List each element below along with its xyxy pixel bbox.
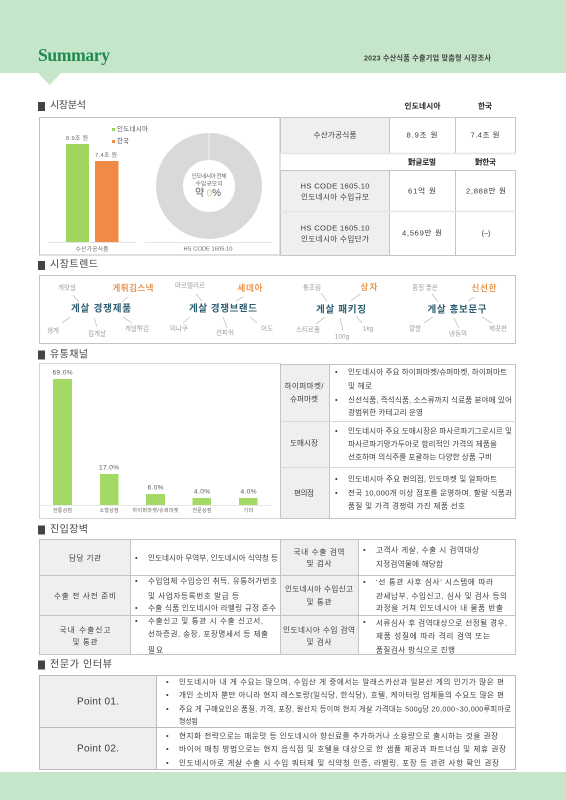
table: market data [280, 100, 516, 256]
donut chart: 수입규모의 [196, 180, 222, 188]
left content: 필요 [148, 644, 163, 654]
left content: • [135, 576, 138, 586]
row: convenience store: • [335, 488, 338, 498]
row: convenience store [294, 474, 512, 510]
report name: 2023 수산식품 수출기업 맞춤형 시장조사 [364, 54, 491, 62]
footer band [0, 772, 566, 800]
right content: 지정검역물에 해당함 [376, 558, 443, 568]
bar chart: channel share [40, 364, 280, 518]
table: entry barriers [39, 539, 516, 654]
row: hypermarket: 슈퍼마켓 [290, 394, 318, 404]
table: market data: 對한국 [475, 156, 496, 166]
header band [0, 0, 566, 85]
point 02: • [166, 758, 169, 768]
row: wholesale market: 도매시장 [290, 438, 318, 448]
point 01: Point 01. [77, 696, 119, 708]
left content: 수출 식품 인도네시아 라벨링 규정 준수 [148, 602, 276, 612]
keyword group: promo phrases: 게살 홍보문구 [428, 304, 487, 316]
keyword group: packaging: 게살 패키징 [316, 304, 366, 316]
table: market data: 한국 [478, 100, 492, 110]
row: wholesale market: 선호하며 의식주를 포괄하는 다양한 상품 구비 [348, 452, 492, 462]
row: wholesale market: • [335, 426, 338, 436]
legend [112, 124, 148, 145]
table: market data: 인도네시아 [404, 100, 440, 110]
keyword group: packaging: 스티로폼 [296, 324, 320, 334]
legend: 인도네시아 [117, 124, 148, 133]
row: convenience store: • [335, 474, 338, 484]
keyword group: promo phrases: 냉동의 [449, 328, 467, 338]
keyword group: competing brands: 게살 경쟁브랜드 [189, 302, 257, 314]
table: market data: 對글로벌 [408, 156, 436, 166]
left labels: 국내 수출신고 [60, 624, 110, 634]
heading: entry barriers [38, 522, 88, 536]
keyword group: packaging: 통조림 [303, 284, 321, 292]
keyword group: competing brands: 미나쿠 [170, 324, 188, 332]
donut chart: 인도네시아 전체 [192, 172, 226, 180]
row: hypermarket: 신선식품, 즉석식품, 소스류까지 식료품 분야에 있어 [348, 394, 512, 404]
heading: expert interview: 전문가 인터뷰 [50, 658, 112, 670]
keyword group: competing products: 게맛살 [58, 282, 76, 292]
bar chart: channel share: 기타 [244, 507, 254, 514]
point 01: 주요 게 구매요인은 품질, 가격, 포장, 원산지 등이며 현지 게살 가격대는 500g당 20,000~30,000루피아로 [179, 704, 511, 714]
row: convenience store: 편의점 [294, 488, 314, 498]
right content: 제품 성질에 따라 격리 검역 또는 [376, 630, 490, 640]
right content: 과정을 거쳐 인도네시아 내 물품 반출 [376, 602, 503, 612]
section: distribution channels [38, 348, 516, 518]
table: market data: 2,888만 원 [466, 186, 506, 196]
bar chart: channel share: 전통상점 [53, 507, 72, 514]
right content: 관세납부, 수입신고, 심사 및 검사 등의 [376, 590, 507, 600]
heading: market trends: 시장트렌드 [50, 258, 98, 270]
legend: 한국 [117, 137, 129, 145]
point 02 [77, 730, 506, 768]
table: market data: (–) [482, 228, 491, 238]
point 01: 형성됨 [179, 716, 198, 726]
point 01: • [166, 690, 169, 700]
bar chart: channel share: 하이퍼마켓/슈퍼마켓 [132, 507, 179, 514]
keyword group: competing products: 게살 경쟁제품 [71, 302, 131, 314]
point 01: 인도네시아 내 게 수요는 많으며, 수입산 게 중에서는 알래스카산과 일본산 게의 인기가 많은 편 [179, 676, 504, 686]
point 01 [77, 676, 511, 726]
left labels: 담당 기관 [69, 552, 101, 562]
right content: 고객사 게살, 수출 시 검역대상 [376, 544, 479, 554]
right content [363, 544, 507, 654]
table: market data: 7.4조 원 [470, 130, 500, 140]
left content: 선하증권, 송장, 포장명세서 등 제출 [148, 628, 268, 638]
bar chart: channel share: 4.0% [240, 488, 257, 496]
keyword group: competing products: 집게살 [88, 328, 106, 338]
heading: market analysis [38, 100, 86, 112]
table: channels [280, 364, 516, 518]
bar chart: seafood products: 7.4조 원 [95, 151, 117, 159]
keyword group: packaging [296, 282, 378, 340]
point 02: 현지화 전략으로는 매운맛 등 인도네시아 향신료를 추가하거나 소용량으로 출시하는 것을 권장 [179, 730, 498, 740]
keyword group: packaging: 1kg [363, 326, 374, 332]
keyword group: competing brands [170, 280, 273, 336]
row: hypermarket: • [335, 368, 338, 376]
row: wholesale market: 파사르파기망가두아로 합리적인 가격의 제품을 [348, 438, 497, 448]
right labels: 국내 수출 검역 [294, 546, 344, 556]
row: wholesale market: 인도네시아 주요 도매시장은 파사르파기그로시르 및 [348, 426, 512, 436]
point 01: • [166, 704, 169, 714]
keyword group: competing brands: 마르텔리르 [175, 280, 205, 290]
row: convenience store: 인도네시아 주요 편의점, 인도마켓 및 알파마트 [348, 474, 497, 484]
keyword group: promo phrases: 신선한 [472, 283, 497, 293]
keyword group: competing brands: 이도 [261, 324, 273, 332]
left content: 및 사업자등록번호 발급 등 [148, 590, 239, 600]
row: wholesale market [290, 426, 512, 462]
heading: distribution channels: 유통채널 [50, 348, 88, 360]
keyword group: competing brands: 세데아 [238, 283, 263, 293]
row: hypermarket: 인도네시아 주요 하이퍼마켓/슈퍼마켓, 하이퍼마트 [348, 366, 507, 376]
left content: • [135, 554, 138, 562]
right labels [283, 546, 355, 646]
point 01: • [166, 678, 169, 686]
point 02: Point 02. [77, 744, 119, 754]
bar chart: seafood products: 8.9조 원 [66, 134, 88, 142]
right content: • [363, 618, 366, 626]
row: convenience store: 전국 10,000개 이상 점포를 운영하며, 할랄 식품과 [348, 488, 512, 498]
row: convenience store: 품질 및 가격 경쟁력 가진 제품 선호 [348, 500, 465, 510]
keyword group: packaging: 상자 [360, 282, 378, 292]
keyword group: competing products [47, 282, 154, 338]
bar chart: seafood products [48, 134, 136, 253]
table: market data: 수산가공식품 [314, 130, 356, 140]
heading: market analysis: 시장분석 [50, 100, 86, 112]
point 01: 개인 소비자 뿐만 아니라 현지 레스토랑(일식당, 한식당), 호텔, 케이터링 업체들의 수요도 많은 편 [179, 690, 504, 700]
row: hypermarket: 광범위한 카테고리 운영 [348, 407, 423, 417]
bar chart: channel share: 6.0% [148, 484, 164, 492]
keyword group: packaging: 100g [335, 334, 350, 340]
point 02: • [166, 744, 169, 754]
right content: • [363, 546, 366, 554]
chart panel: market size [40, 118, 280, 255]
point 02: • [166, 732, 169, 740]
right content: ‘선 통관 사후 심사’ 시스템에 따라 [376, 576, 493, 586]
point 02: 인도네시아로 게살 수출 시 수입 쿼터제 및 식약청 인증, 라벨링, 포장 등 관련 사항 확인 권장 [179, 758, 499, 768]
bar chart: channel share: 4.0% [194, 488, 210, 496]
donut chart: HS CODE 1605.10 [184, 246, 232, 252]
left content: 수입업체 수입승인 취득, 유통허가번호 [148, 576, 277, 586]
panel: word clouds [40, 276, 516, 344]
left content: • [135, 604, 138, 612]
title: Summary [38, 45, 110, 65]
right labels: 및 통관 [306, 596, 332, 606]
left labels [54, 552, 116, 646]
section: expert interview [38, 658, 516, 770]
row: hypermarket [284, 366, 512, 417]
keyword group: competing products: 게튀김스낵 [112, 283, 154, 293]
keyword group: competing brands: 선피쉬 [216, 328, 234, 336]
row: hypermarket: • [335, 396, 338, 404]
bar chart: channel share: 전문상점 [192, 507, 212, 514]
table: market data: 61억 원 [408, 186, 436, 196]
keyword group: promo phrases: 품질 좋은 [412, 284, 438, 292]
right content: 서류심사 후 검역대상으로 선정될 경우, [376, 618, 507, 628]
table: market data: 8.9조 원 [406, 130, 438, 140]
table: market data: 인도네시아 수입규모 [301, 192, 369, 202]
bar chart: channel share: 17.0% [99, 464, 119, 472]
bar chart: channel share: 69.0% [52, 370, 73, 376]
heading: entry barriers: 진입장벽 [50, 522, 88, 536]
left content: 인도네시아 무역부, 인도네시아 식약청 등 [148, 552, 278, 562]
table: interview points [39, 675, 516, 770]
keyword group: promo phrases: 깨끗한 [489, 324, 507, 332]
left labels: 및 통관 [72, 636, 98, 646]
section: entry barriers [38, 522, 516, 654]
bar chart: channel share: 소형상점 [100, 507, 118, 514]
keyword group: competing products: 게살튀김 [125, 324, 149, 332]
heading: distribution channels [38, 348, 88, 360]
keyword group: promo phrases [409, 283, 507, 338]
bar chart: seafood products: 수산가공식품 [76, 245, 109, 253]
section: market analysis [38, 100, 516, 256]
right labels: 및 검사 [306, 636, 332, 646]
table: market data: HS CODE 1605.10 [300, 224, 370, 232]
table: market data: HS CODE 1605.10 [300, 182, 370, 190]
section: market trends [38, 258, 516, 344]
row: hypermarket: 및 헤로 [348, 380, 372, 390]
left content [135, 552, 278, 654]
right labels: 및 검사 [306, 558, 332, 568]
donut chart [145, 133, 272, 252]
keyword group: competing products: 생게 [47, 326, 59, 334]
donut chart: 약 0% [195, 187, 221, 199]
left labels: 수출 전 사전 준비 [54, 590, 116, 600]
left content: 수출신고 및 통관 시 수출 신고서, [148, 616, 263, 626]
right content: • [363, 578, 366, 586]
table: market data: 4,569만 원 [402, 228, 442, 238]
row: hypermarket: 하이퍼마켓/ [284, 380, 324, 390]
right labels: 인도네시아 수입신고 [285, 584, 353, 594]
right labels: 인도네시아 수입 검역 [283, 624, 355, 634]
point 02: 바이어 매칭 방법으로는 현지 음식점 및 호텔을 대상으로 한 샘플 제공과 파트너십 및 제휴 권장 [179, 744, 506, 754]
table: market data: 인도네시아 수입단가 [301, 234, 369, 244]
keyword group: promo phrases: 할랄 [409, 324, 421, 332]
right content: 품질검사 방식으로 진행 [376, 644, 455, 654]
left content: • [135, 616, 138, 626]
